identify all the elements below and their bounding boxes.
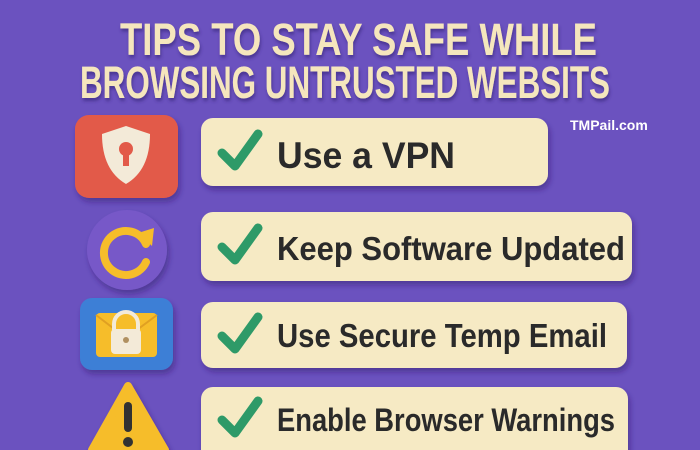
watermark: TMPail.com (570, 117, 648, 133)
title: TIPS TO STAY SAFE WHILE (120, 14, 597, 65)
card: Keep Software Updated: Keep Software Updated (277, 230, 625, 267)
title (80, 14, 610, 108)
card: Enable Browser Warnings (201, 387, 628, 450)
card: Use a VPN (201, 118, 548, 186)
icon: refresh (87, 210, 167, 290)
icon: email lock (80, 298, 173, 370)
icon: warning (92, 386, 165, 450)
card: Use Secure Temp Email (201, 302, 627, 368)
card: Keep Software Updated (201, 212, 632, 281)
card: Use Secure Temp Email: Use Secure Temp Email (277, 317, 607, 354)
card: Enable Browser Warnings: Enable Browser Warnings (277, 402, 615, 438)
icon: shield (75, 115, 178, 198)
card: Use a VPN: Use a VPN (277, 135, 455, 176)
